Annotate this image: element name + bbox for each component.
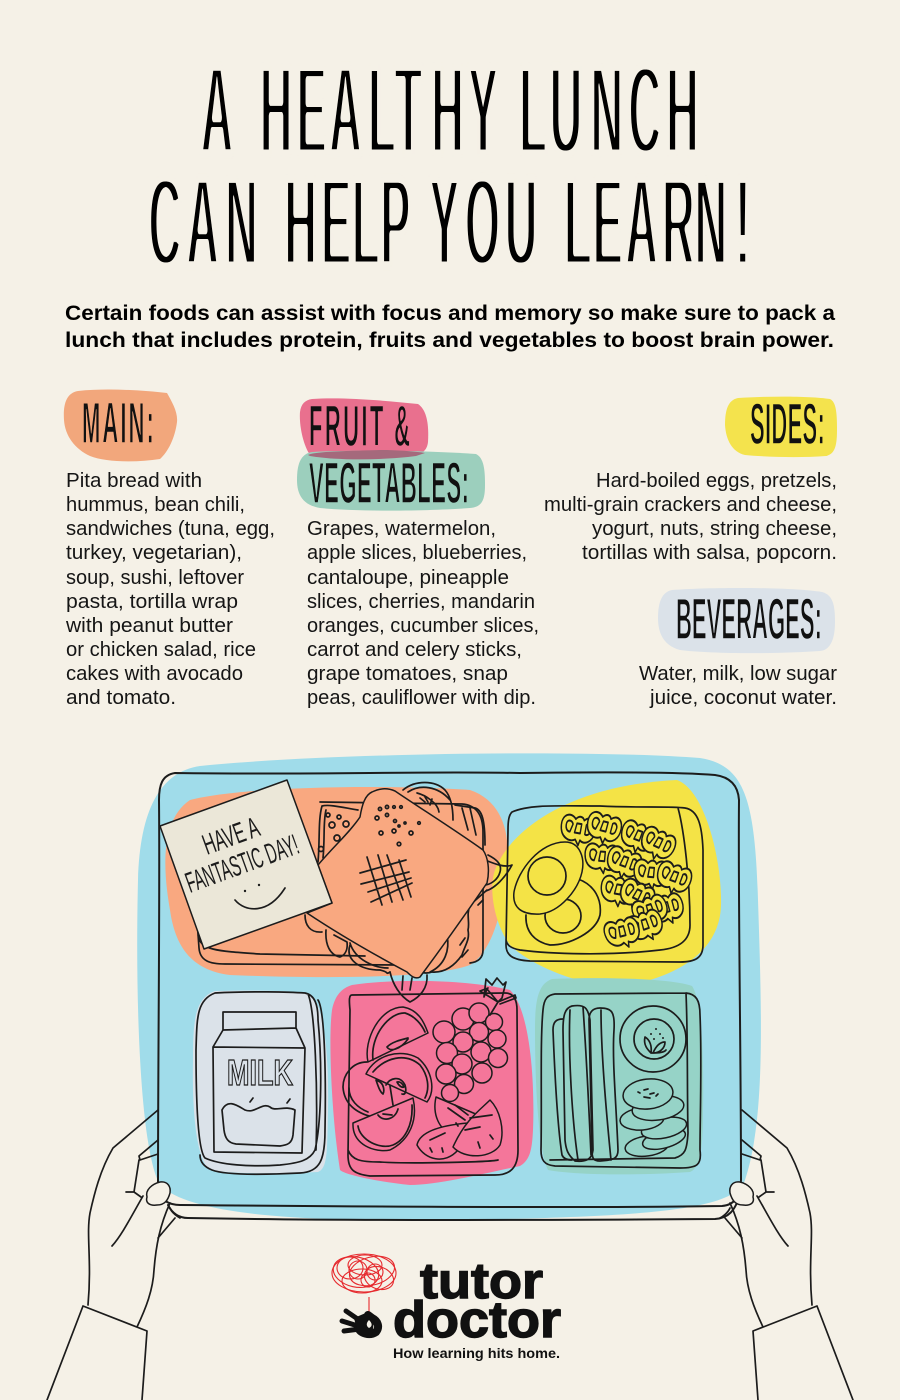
back bread slice: [318, 805, 358, 862]
main heading: MAIN:: [82, 391, 154, 456]
intro text: [65, 302, 835, 352]
vegetables heading blob: [297, 451, 485, 511]
fruit text: grape tomatoes, snap: [307, 663, 508, 685]
beverages text: juice, coconut water.: [649, 687, 837, 709]
main text: or chicken salad, rice: [66, 639, 256, 661]
fruit text: [307, 518, 539, 709]
dip bowl: [620, 1006, 686, 1072]
main text: turkey, vegetarian),: [66, 542, 242, 564]
beverages text: [639, 663, 837, 709]
main compartment blob: [165, 787, 508, 977]
main text: cakes with avocado: [66, 663, 243, 685]
main text: soup, sushi, leftover: [66, 567, 244, 589]
tray outline: [158, 772, 741, 1220]
boiled eggs: [514, 842, 600, 945]
fruit text: peas, cauliflower with dip.: [307, 687, 536, 709]
note card: [160, 780, 332, 949]
logo hand: [342, 1311, 378, 1335]
panel: beverages: [639, 587, 837, 709]
watermelon slices: [417, 1097, 502, 1159]
main heading blob: [64, 390, 177, 461]
sides box: [506, 806, 703, 962]
sides text: Hard-boiled eggs, pretzels,: [596, 470, 837, 492]
main text: sandwiches (tuna, egg,: [66, 518, 275, 540]
blob overlap: [308, 450, 425, 459]
vegetable compartment blob: [535, 978, 703, 1174]
main text: Pita bread with: [66, 470, 202, 492]
logo wordmark: tutor: [420, 1253, 543, 1309]
title: [130, 41, 770, 294]
fruit text: oranges, cucumber slices,: [307, 615, 539, 637]
apple slices: [343, 1007, 432, 1151]
celery sticks: [553, 1006, 618, 1161]
tray blue backdrop: [137, 753, 761, 1220]
grape stem and leaf: [480, 978, 516, 1015]
sides heading: SIDES:: [750, 392, 825, 457]
fruit box: [348, 993, 518, 1176]
main text: hummus, bean chili,: [66, 494, 245, 516]
main compartment box: [197, 802, 483, 965]
grapes: [433, 1003, 508, 1102]
illustration: lunch tray: [47, 753, 853, 1400]
beverages heading: BEVERAGES:: [676, 587, 822, 652]
main text: with peanut butter: [65, 615, 233, 637]
pretzels: [558, 810, 695, 952]
vegetables heading: VEGETABLES:: [309, 451, 469, 516]
milk compartment blob: [193, 990, 328, 1173]
logo wordmark second line: doctor: [393, 1291, 561, 1348]
sides text: yogurt, nuts, string cheese,: [592, 518, 837, 540]
cucumber slices: [619, 1076, 689, 1159]
sides text: multi-grain crackers and cheese,: [544, 494, 837, 516]
intro text: Certain foods can assist with focus and memory so make sure to pack a: [65, 302, 835, 325]
logo brain scribble: [330, 1252, 398, 1312]
fruit compartment blob: [330, 981, 533, 1185]
sides compartment blob: [492, 780, 721, 986]
fruit heading blob: [300, 398, 428, 459]
cucumber behind sandwich: [403, 782, 485, 845]
milk box: [196, 992, 325, 1174]
note card: FANTASTIC DAY!: [181, 829, 303, 900]
sandwich bread: [307, 789, 488, 978]
tomato and lettuce under sandwich: [326, 855, 512, 1002]
beverages heading blob: [658, 588, 835, 653]
logo: tutor doctor: [330, 1252, 561, 1361]
note card: HAVE A: [198, 812, 264, 862]
right hand: [720, 1110, 853, 1400]
logo tagline: How learning hits home.: [393, 1345, 560, 1361]
fruit text: Grapes, watermelon,: [307, 518, 496, 540]
fruit text: cantaloupe, pineapple: [307, 567, 509, 589]
fruit text: carrot and celery sticks,: [307, 639, 522, 661]
sides heading blob: [725, 397, 837, 457]
fruit heading: FRUIT &: [309, 394, 410, 459]
title: CAN HELP YOU LEARN!: [149, 153, 750, 294]
main text: [65, 470, 275, 709]
fruit text: slices, cherries, mandarin: [307, 591, 535, 613]
title: A HEALTHY LUNCH: [201, 41, 698, 182]
vegetable box: [541, 993, 701, 1168]
sides text: [544, 470, 837, 564]
milk box: MILK: [227, 1052, 293, 1093]
panel: sides: [544, 392, 837, 564]
intro text: lunch that includes protein, fruits and vegetables to boost brain power.: [65, 329, 834, 352]
beverages text: Water, milk, low sugar: [639, 663, 837, 685]
panel: main: [64, 390, 275, 709]
panel: fruit and vegetables: [297, 394, 539, 709]
fruit text: apple slices, blueberries,: [307, 542, 527, 564]
sides text: tortillas with salsa, popcorn.: [582, 542, 837, 564]
main text: and tomato.: [66, 687, 176, 709]
main text: pasta, tortilla wrap: [66, 591, 238, 613]
left hand: [47, 1110, 180, 1400]
